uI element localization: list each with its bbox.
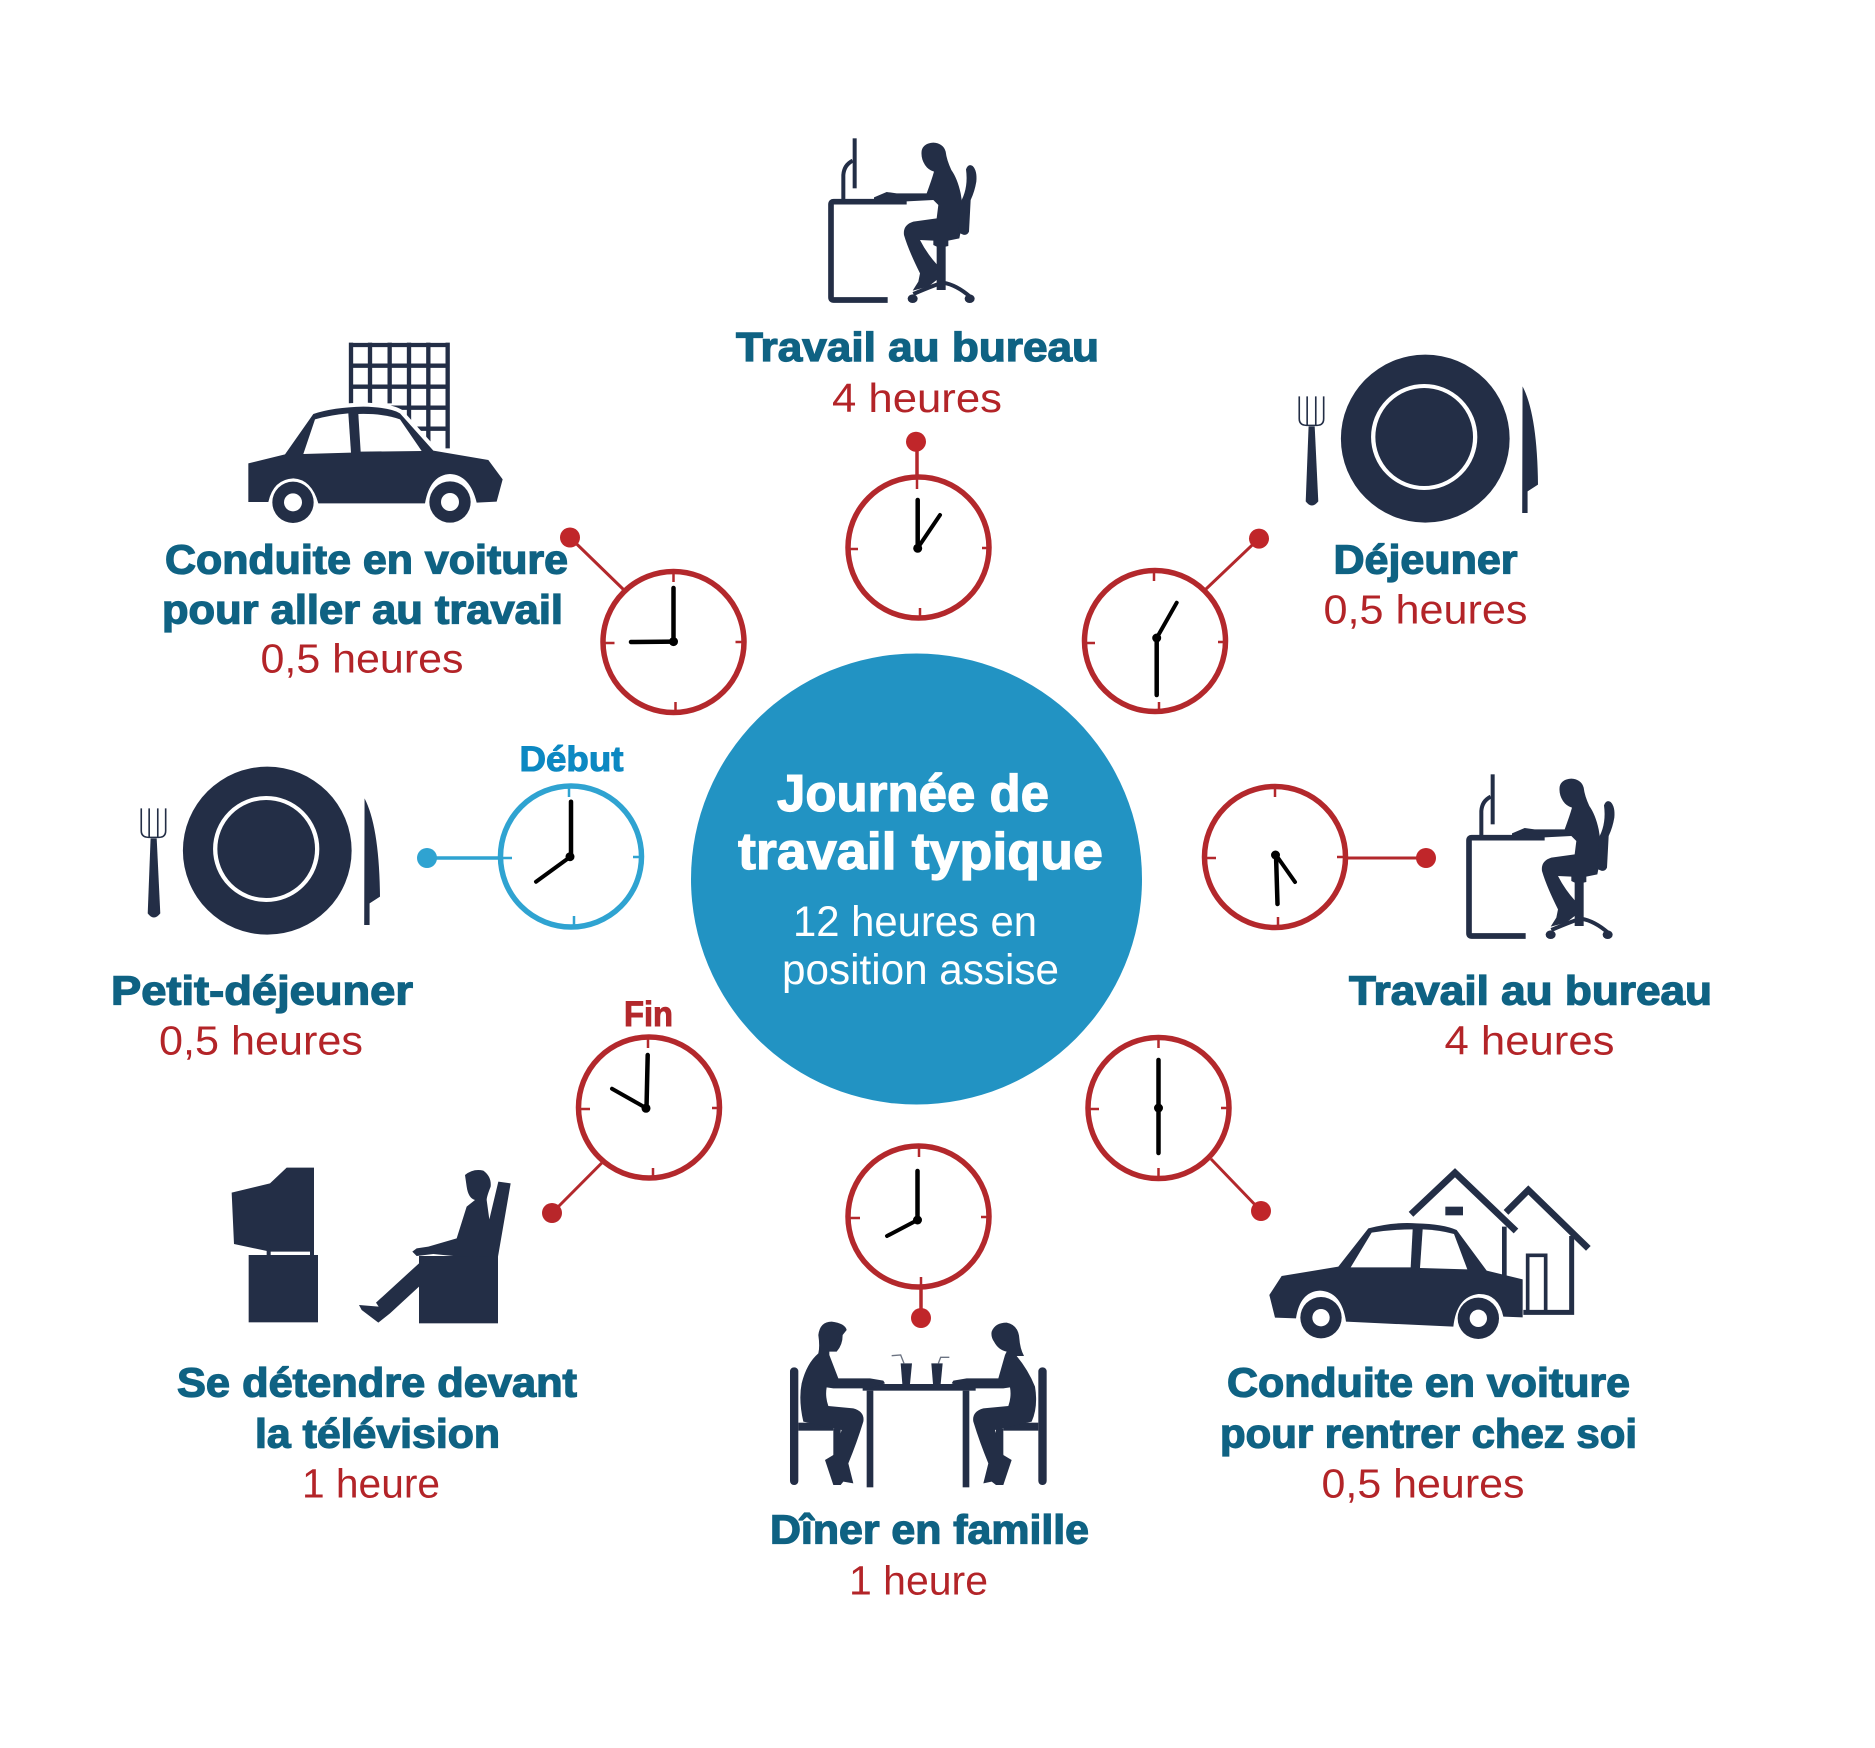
heading line 2: la télévision xyxy=(255,1411,500,1457)
clock: upper left 9:00 xyxy=(560,528,744,712)
heading: Se détendre devant xyxy=(177,1360,577,1406)
icon: car and houses xyxy=(1269,1173,1588,1339)
heading: Petit-déjeuner xyxy=(111,968,413,1014)
panel: relaxing in front of TV xyxy=(177,1168,577,1507)
central circle with title: 12 heures en xyxy=(793,898,1037,946)
icon: woman at desk xyxy=(1469,774,1615,939)
panel: lunch xyxy=(1299,355,1538,633)
heading: Conduite en voiture xyxy=(165,537,568,583)
duration: 0,5 heures xyxy=(260,636,464,682)
icon: woman at desk xyxy=(831,138,977,303)
panel: office work right xyxy=(1349,774,1712,1064)
label: Fin: Fin xyxy=(624,995,673,1034)
heading: Travail au bureau xyxy=(1349,968,1712,1014)
panel: drive home xyxy=(1220,1173,1637,1507)
central circle with title: travail typique xyxy=(738,823,1103,881)
central circle with title: position assise xyxy=(782,946,1059,994)
clock: top 1:00 xyxy=(847,432,990,620)
heading: Déjeuner xyxy=(1334,537,1518,583)
panel: family dinner xyxy=(770,1322,1089,1604)
icon: man watching television xyxy=(232,1168,511,1323)
icon: plate and cutlery xyxy=(1299,355,1538,523)
label: Début: Début xyxy=(520,740,624,779)
heading: Travail au bureau xyxy=(736,324,1099,370)
central circle with title: Journée de xyxy=(777,765,1049,823)
clock: right 5:30 xyxy=(1204,786,1436,928)
duration: 4 heures xyxy=(1444,1018,1614,1064)
central circle with title xyxy=(691,654,1142,1104)
duration: 0,5 heures xyxy=(159,1018,363,1064)
clock: lower left 10:00 xyxy=(542,1037,720,1223)
clock: upper right 12:30 xyxy=(1084,529,1269,712)
panel: breakfast xyxy=(111,767,413,1064)
heading line 2: pour rentrer chez soi xyxy=(1220,1411,1637,1457)
clock: left start 7:00 xyxy=(417,786,642,927)
icon: plate and cutlery xyxy=(141,767,380,935)
duration: 1 heure xyxy=(302,1461,440,1507)
icon: couple at table xyxy=(790,1322,1047,1487)
heading line 2: pour aller au travail xyxy=(162,587,563,633)
duration: 4 heures xyxy=(832,375,1002,421)
duration: 0,5 heures xyxy=(1322,1461,1524,1507)
heading: Conduite en voiture xyxy=(1227,1360,1630,1406)
duration: 1 heure xyxy=(849,1558,988,1604)
heading: Dîner en famille xyxy=(770,1507,1089,1553)
clock: bottom 8:00 xyxy=(848,1146,989,1328)
panel: drive to work xyxy=(162,343,568,682)
icon: car and office building xyxy=(248,343,503,523)
panel: office work top xyxy=(736,138,1099,421)
duration: 0,5 heures xyxy=(1324,587,1528,633)
clock: lower right 6:00 xyxy=(1088,1038,1271,1221)
